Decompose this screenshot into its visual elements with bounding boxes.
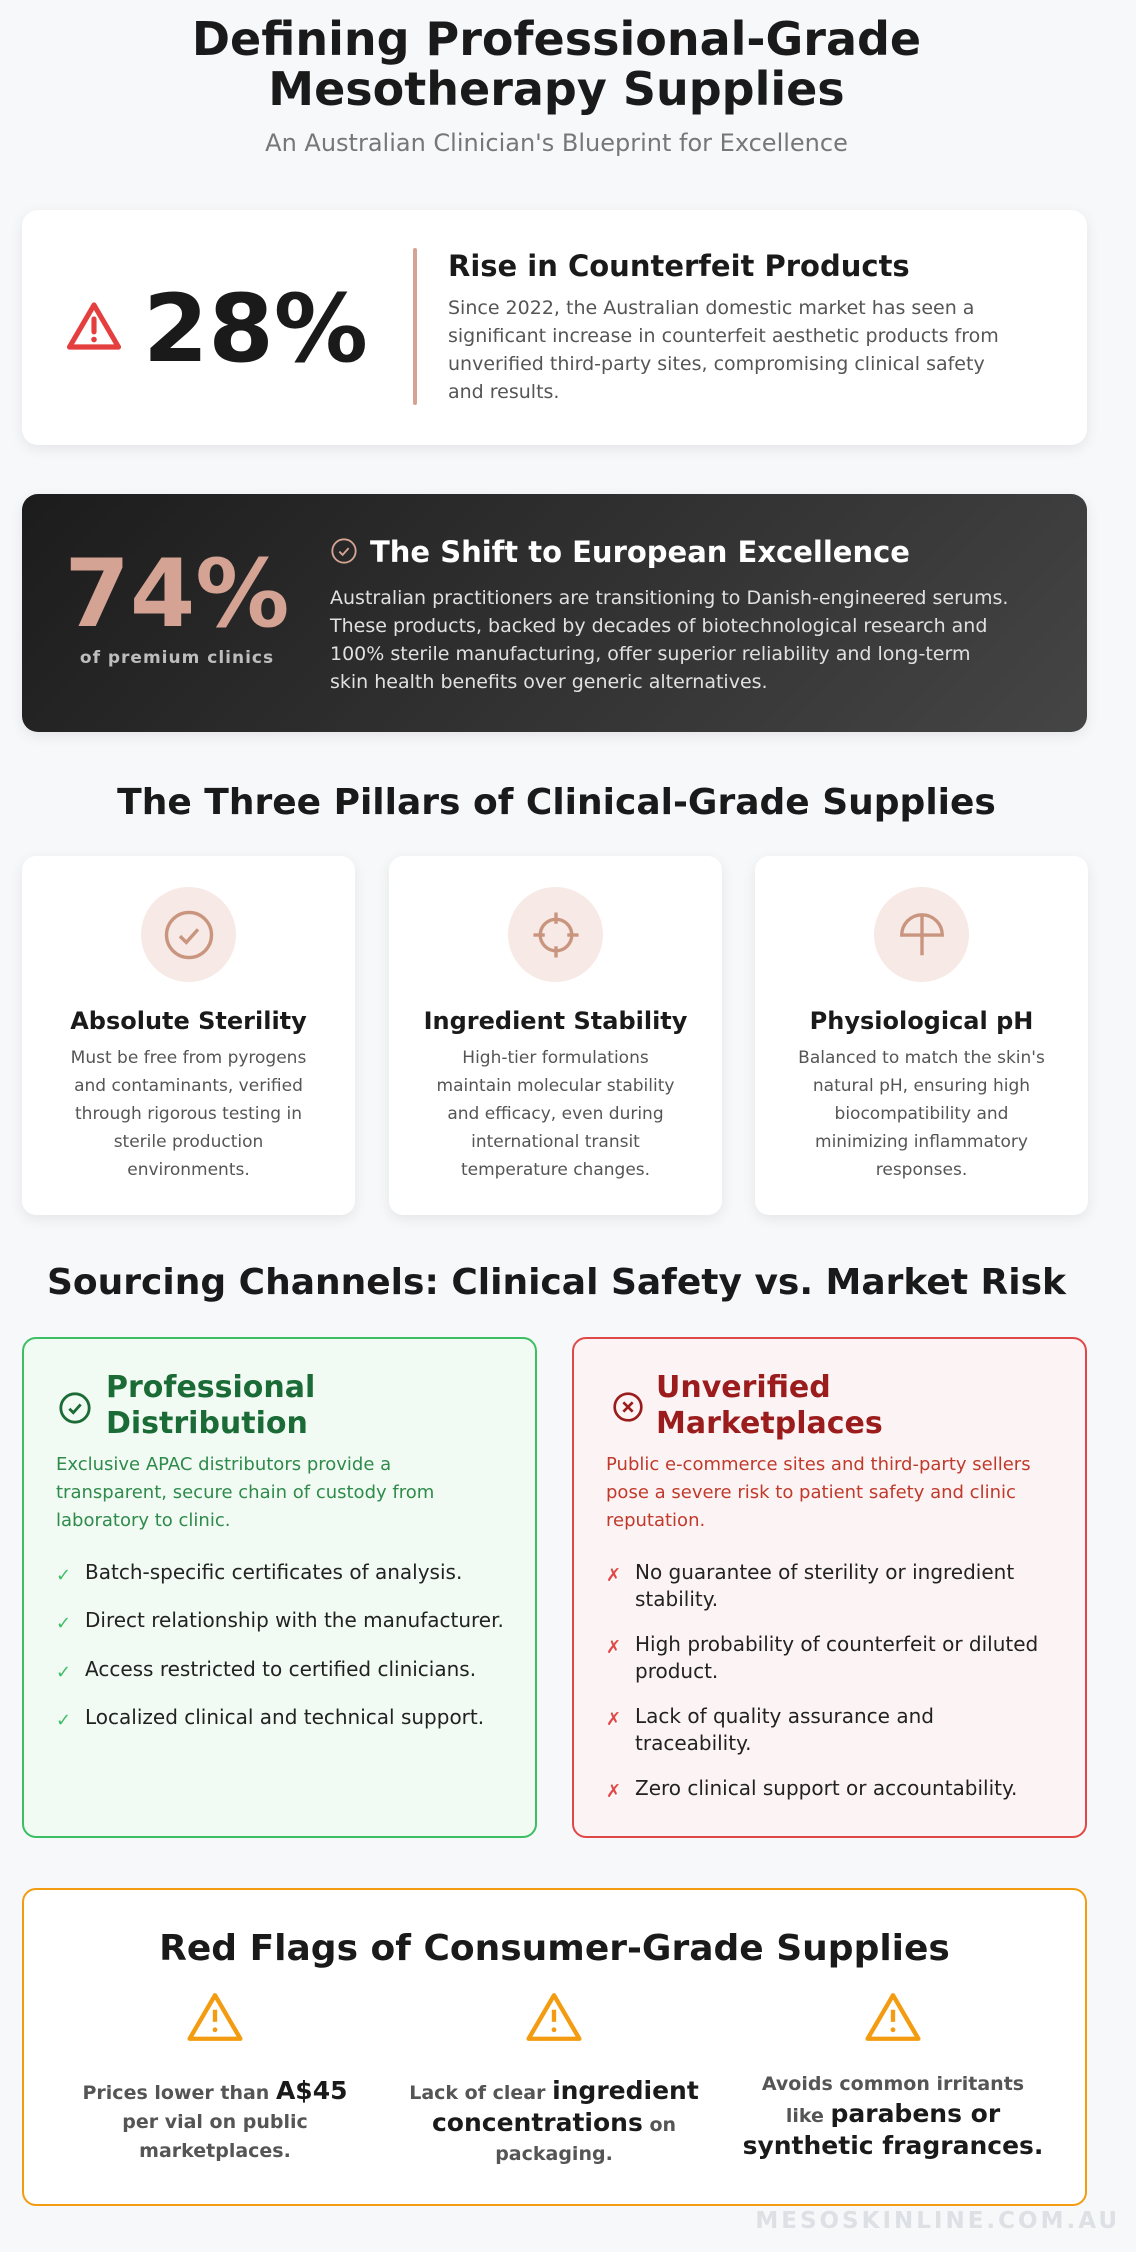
panel: pH: Physiological pH xyxy=(810,1007,1033,1035)
stat 74%: of premium clinics xyxy=(80,648,274,668)
subtitle: An Australian Clinician's Blueprint for Excellence xyxy=(265,129,848,157)
heading: Red Flags of Consumer-Grade Supplies xyxy=(159,1928,950,1969)
heading: sourcing: Sourcing Channels: Clinical Safety vs. Market Risk xyxy=(47,1262,1066,1303)
panel: european shift xyxy=(22,494,1087,732)
panel: unverified marketplaces: No guarantee of sterility or ingredient stability. xyxy=(635,1560,1014,1611)
heading xyxy=(106,1370,315,1441)
panel: sterility: Absolute Sterility xyxy=(70,1007,307,1035)
flag: concentrations: packaging. xyxy=(495,2143,613,2165)
flag: irritants xyxy=(743,1993,1043,2160)
panel: stability xyxy=(389,856,722,1215)
flag: irritants: Avoids common irritants xyxy=(762,2073,1024,2095)
heading xyxy=(656,1370,883,1441)
panel: unverified marketplaces: ✗ xyxy=(606,1565,621,1586)
panel: unverified marketplaces: High probability of counterfeit or diluted product. xyxy=(635,1632,1038,1683)
description: Public e-commerce sites and third-party sellers pose a severe risk to patient safety and clinic reputation. xyxy=(606,1454,1031,1531)
panel: professional distribution xyxy=(22,1337,537,1838)
stat number: 28% xyxy=(143,275,368,384)
heading: Marketplaces xyxy=(656,1406,883,1441)
heading: Distribution xyxy=(106,1406,308,1441)
text block: The Shift to European Excellence xyxy=(370,535,910,569)
flag: concentrations: Lack of clear ingredient xyxy=(409,2076,699,2105)
text block: and results. xyxy=(448,381,559,403)
text block: skin health benefits over generic alternatives. xyxy=(330,671,768,693)
panel: professional distribution: ✓ xyxy=(56,1613,71,1634)
panel: professional distribution: Batch-specific certificates of analysis. xyxy=(85,1560,462,1584)
flag: price xyxy=(82,1993,348,2162)
panel: sterility: Must be free from pyrogens and contaminants, verified through rigorous testing in sterile production environments. xyxy=(71,1048,306,1180)
title: Defining Professional-Grade xyxy=(192,12,921,66)
flag: concentrations xyxy=(409,1993,699,2165)
description: Exclusive APAC distributors provide a transparent, secure chain of custody from laboratory to clinic. xyxy=(56,1454,434,1531)
panel: counterfeit stat xyxy=(22,210,1087,445)
panel: professional distribution: Localized clinical and technical support. xyxy=(85,1705,484,1729)
panel: pH xyxy=(755,856,1088,1215)
title xyxy=(192,12,921,116)
title: Mesotherapy Supplies xyxy=(268,62,845,116)
heading: Professional xyxy=(106,1370,315,1405)
panel: professional distribution: Direct relationship with the manufacturer. xyxy=(85,1608,504,1632)
flag: price: Prices lower than A$45 xyxy=(82,2076,348,2105)
panel: stability: Ingredient Stability xyxy=(424,1007,687,1035)
icon: check circle xyxy=(141,887,236,982)
panel: stability: High-tier formulations maintain molecular stability and efficacy, even during international transit temperature changes. xyxy=(437,1048,674,1180)
panel: professional distribution: Access restricted to certified clinicians. xyxy=(85,1657,476,1681)
list xyxy=(56,1560,504,1731)
panel: unverified marketplaces: Zero clinical support or accountability. xyxy=(635,1776,1017,1800)
footer watermark: MESOSKINLINE.COM.AU xyxy=(755,2208,1120,2234)
panel: unverified marketplaces: ✗ xyxy=(606,1637,621,1658)
panel: red flags xyxy=(22,1888,1087,2206)
flag: price: per vial on public xyxy=(122,2111,308,2133)
panel: unverified marketplaces xyxy=(572,1337,1087,1838)
icon: umbrella xyxy=(874,887,969,982)
flag: irritants: synthetic fragrances. xyxy=(743,2131,1043,2160)
text block: 100% sterile manufacturing, offer superior reliability and long-term xyxy=(330,643,970,665)
text block xyxy=(448,249,999,403)
heading: three pillars: The Three Pillars of Clinical-Grade Supplies xyxy=(117,782,996,823)
icon: crosshair xyxy=(508,887,603,982)
panel: professional distribution: ✓ xyxy=(56,1662,71,1683)
icon: check xyxy=(59,1392,91,1424)
icon: x circle xyxy=(613,1392,643,1422)
panel: unverified marketplaces: Lack of quality assurance and traceability. xyxy=(635,1704,934,1755)
stat 74%: 74% xyxy=(64,540,290,649)
text block: Australian practitioners are transitioning to Danish-engineered serums. xyxy=(330,587,1008,609)
panel: unverified marketplaces: ✗ xyxy=(606,1709,621,1730)
text block: Since 2022, the Australian domestic market has seen a significant increase in counterfeit aesthetic products from unverified third-party sites, compromising clinical safety xyxy=(448,297,999,375)
flag: price: marketplaces. xyxy=(139,2140,291,2162)
panel: sterility xyxy=(22,856,355,1215)
text block xyxy=(330,535,1008,693)
panel: unverified marketplaces: ✗ xyxy=(606,1781,621,1802)
icon: warning xyxy=(66,302,122,350)
list xyxy=(606,1560,1038,1802)
text block: Rise in Counterfeit Products xyxy=(448,249,910,283)
heading: Unverified xyxy=(656,1370,831,1405)
panel: professional distribution: ✓ xyxy=(56,1565,71,1586)
panel: professional distribution: ✓ xyxy=(56,1710,71,1731)
flag: concentrations: concentrations on xyxy=(432,2108,676,2137)
panel: pH: Balanced to match the skin's natural pH, ensuring high biocompatibility and minimizing inflammatory responses. xyxy=(798,1048,1045,1180)
text block: These products, backed by decades of biotechnological research and xyxy=(330,615,987,637)
flag: irritants: like parabens or xyxy=(786,2099,1000,2128)
